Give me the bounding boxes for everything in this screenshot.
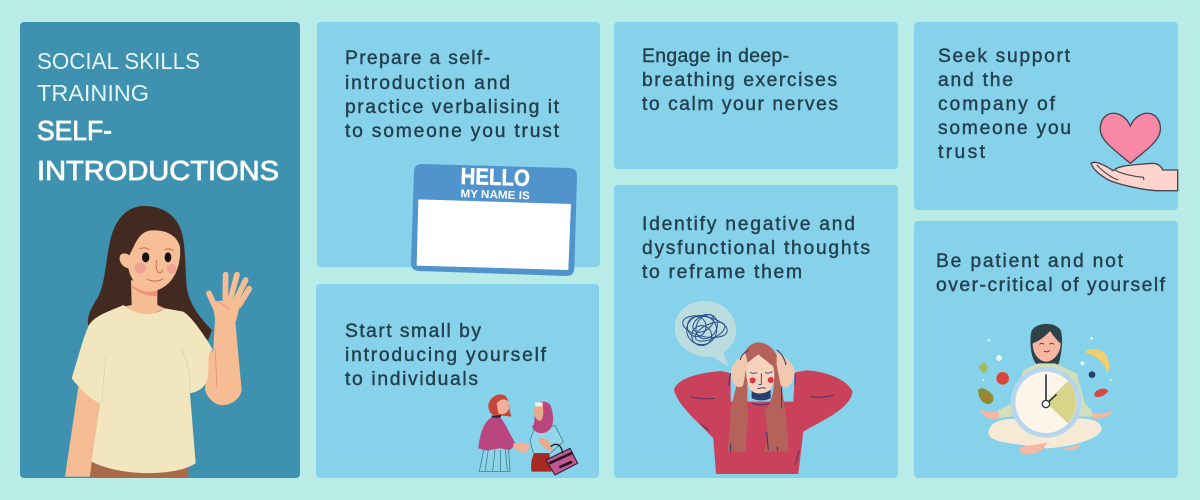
text: seek support: someone you <box>938 118 1071 139</box>
text: prepare a self-introduction: Prepare a self- <box>345 48 490 69</box>
icon: waving woman <box>65 206 249 477</box>
heading: social skills training <box>37 48 200 106</box>
panel: prepare a self-introduction <box>317 22 600 276</box>
text: negative thoughts: to reframe them <box>642 262 802 283</box>
text: seek support: company of <box>938 94 1056 115</box>
text: deep-breathing: to calm your nerves <box>642 94 838 115</box>
icon: meditating woman with clock and food <box>978 324 1113 454</box>
icon: hello name tag <box>411 163 577 276</box>
text: seek support <box>938 46 1071 163</box>
panel: title <box>20 22 300 478</box>
heading: social skills training: SOCIAL SKILLS <box>37 48 200 74</box>
icon: two women shaking hands <box>478 395 578 475</box>
text: deep-breathing: breathing exercises <box>642 70 837 91</box>
text: prepare a self-introduction <box>345 48 560 142</box>
panel: be patient <box>914 221 1178 478</box>
heading: self-introductions: SELF- <box>37 115 112 146</box>
panel: deep-breathing <box>614 22 898 169</box>
text: negative thoughts <box>642 214 870 283</box>
text: be patient: Be patient and not <box>936 251 1124 272</box>
text: seek support: and the <box>938 70 1013 91</box>
text: seek support: trust <box>938 142 986 163</box>
heading: self-introductions <box>37 115 279 186</box>
panel: seek support <box>914 22 1178 210</box>
panel: negative thoughts <box>614 185 898 478</box>
text: seek support: Seek support <box>938 46 1071 67</box>
icon: hello name tag: HELLO <box>460 163 530 191</box>
text: start small <box>345 321 547 390</box>
text: start small: introducing yourself <box>345 345 547 366</box>
text: negative thoughts: Identify negative and <box>642 214 855 235</box>
panel: start small <box>316 284 599 478</box>
text: prepare a self-introduction: practice verbalising it <box>345 97 560 118</box>
icon: heart over open hand <box>1091 113 1178 191</box>
icon: stressed woman with tangled thought bubble <box>674 301 853 474</box>
icon: hello name tag: MY NAME IS <box>460 188 530 202</box>
text: be patient: over-critical of yourself <box>936 275 1166 296</box>
text: prepare a self-introduction: introduction and <box>345 73 510 94</box>
raised hand <box>209 275 249 322</box>
text: prepare a self-introduction: to someone you trust <box>345 121 560 142</box>
text: be patient <box>936 251 1166 296</box>
text: negative thoughts: dysfunctional thoughts <box>642 238 870 259</box>
text: start small: Start small by <box>345 321 481 342</box>
text: deep-breathing: Engage in deep- <box>642 46 789 67</box>
text: deep-breathing <box>642 46 838 115</box>
heading: social skills training: TRAINING <box>37 80 149 106</box>
text: start small: to individuals <box>345 369 478 390</box>
heading: self-introductions: INTRODUCTIONS <box>37 155 279 186</box>
